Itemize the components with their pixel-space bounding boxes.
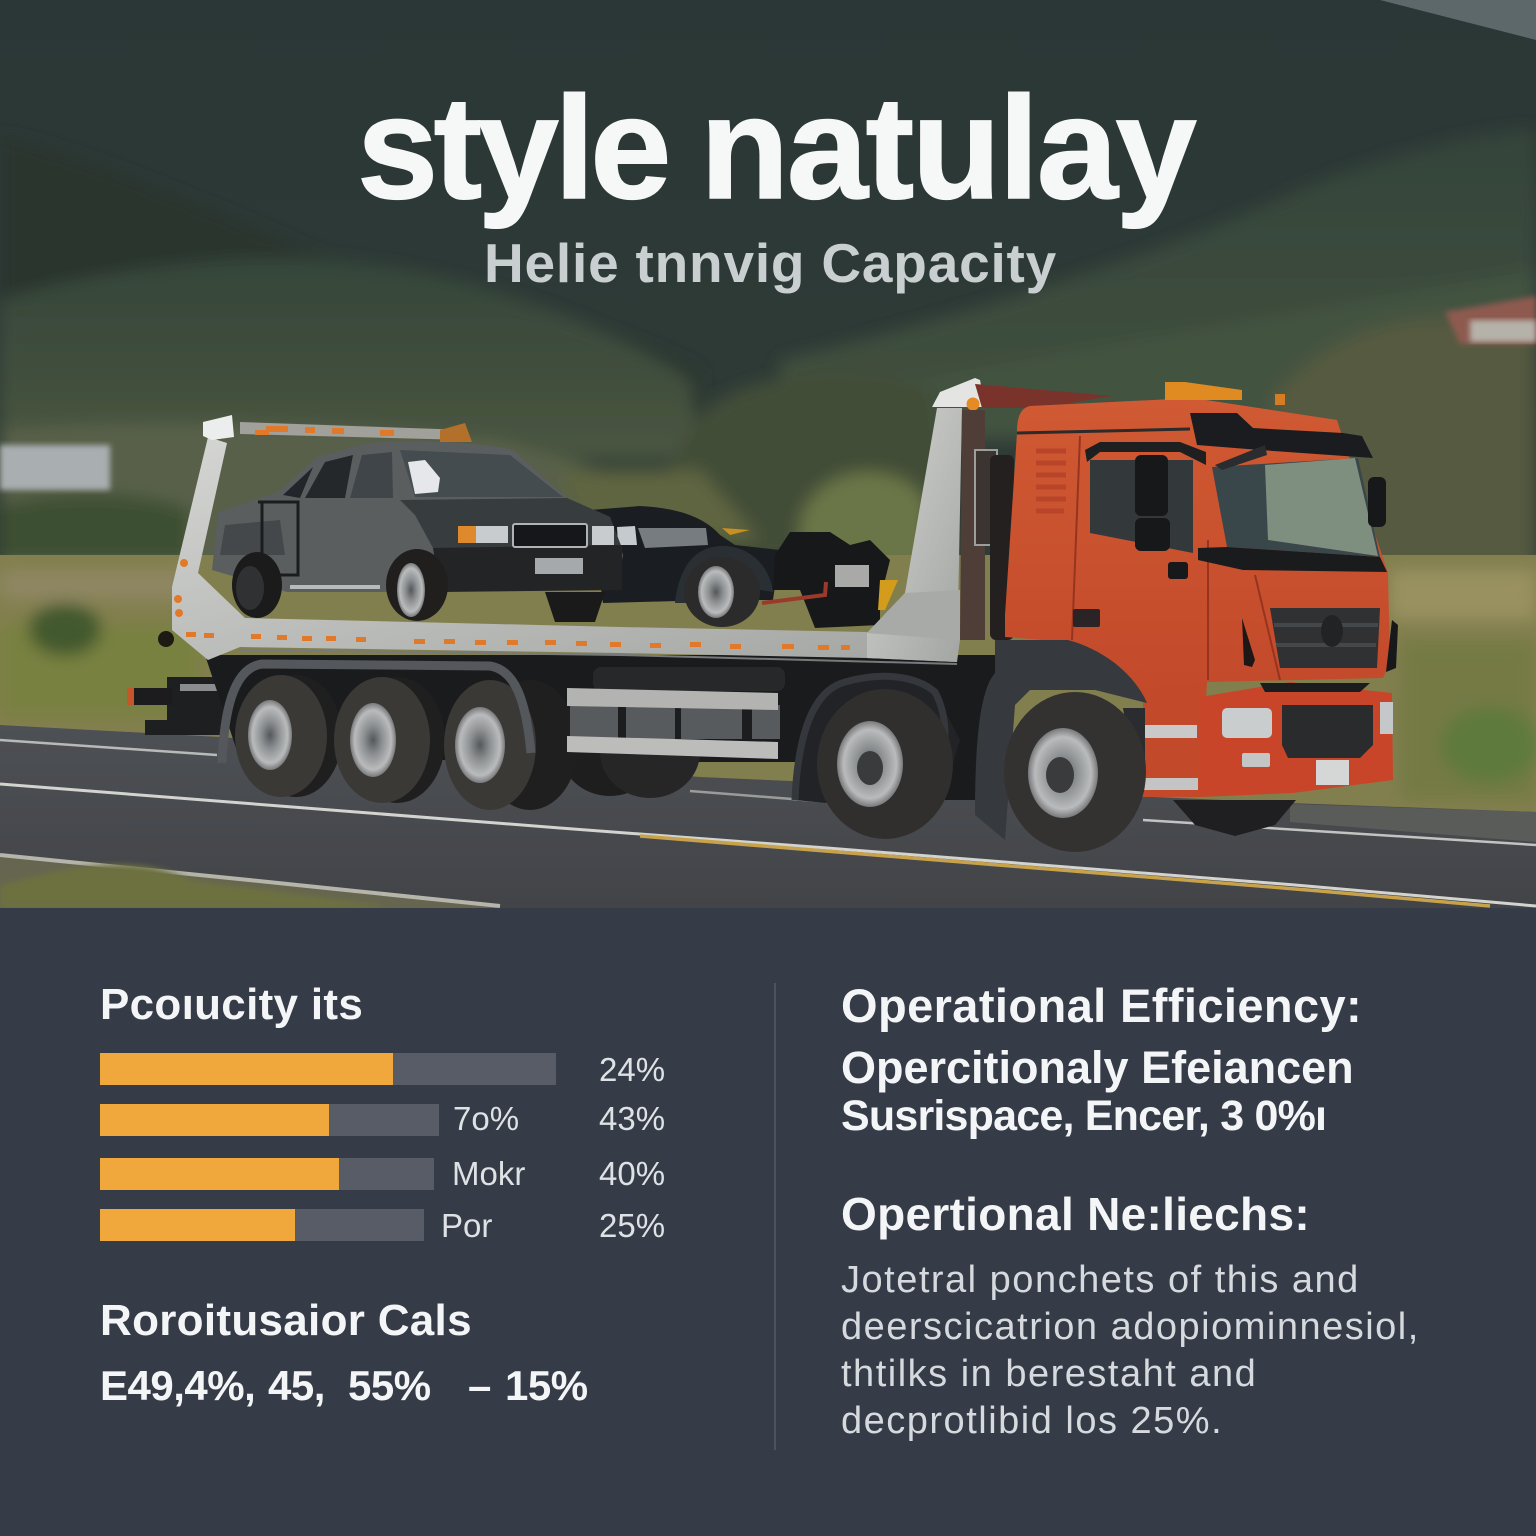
bar row 2: [100, 1100, 665, 1137]
bar row 2: 7o%: [453, 1100, 519, 1137]
stat values: 55%: [348, 1362, 431, 1409]
background hills: [0, 0, 1536, 600]
rear hitch frame: [127, 631, 227, 735]
heading: bars: Pcoıucity its: [100, 980, 363, 1029]
rear axles: [235, 675, 700, 810]
orange truck cab: [990, 382, 1398, 797]
heading: needs: Opertional Ne:liechs:: [841, 1188, 1310, 1240]
panel: operational efficiency: [841, 979, 1420, 1442]
bar row 3: Mokr: [452, 1155, 525, 1192]
grey sedan on deck: [212, 442, 623, 622]
body text: decprotlibid los 25%.: [841, 1400, 1223, 1442]
stat values: E49,4%,: [100, 1362, 255, 1409]
heading: efficiency: Operational Efficiency:: [841, 979, 1362, 1032]
stat values: 15%: [505, 1362, 588, 1409]
panel: productivity bars: [100, 980, 665, 1244]
panel: rotation stats: [100, 1296, 588, 1409]
lower dark panel: [0, 908, 1536, 1536]
subheading line 2: Susrispace, Encer, 3 0%ı: [841, 1092, 1326, 1140]
bar row 4: 25%: [599, 1207, 665, 1244]
road: [0, 725, 1536, 908]
title: natulay: [700, 66, 1194, 229]
subtitle: Helie tnnvig Capacity: [484, 232, 1057, 294]
front wheels and arches: [795, 640, 1296, 852]
body text: Jotetral ponchets of this and: [841, 1259, 1360, 1301]
rear fender: [222, 664, 531, 763]
column divider: [774, 983, 776, 1450]
stat values: –: [468, 1362, 491, 1409]
headboard: [867, 378, 1112, 662]
body text: [841, 1259, 1420, 1442]
photo: flatbed tow truck carrying cars on a rural road: [0, 0, 1536, 908]
fuel tanks and rails: [567, 667, 785, 759]
stat values: [100, 1362, 588, 1409]
bar row 3: 40%: [599, 1155, 665, 1192]
bar row 3: [100, 1155, 665, 1192]
body text: thtilks in berestaht and: [841, 1353, 1257, 1395]
flatbed tow truck: [127, 378, 1398, 852]
bar row 1: [100, 1051, 665, 1088]
subheading line 1: Opercitionaly Efeiancen: [841, 1042, 1354, 1093]
body text: deerscicatrion adopiominnesiol,: [841, 1306, 1420, 1348]
flatbed deck: [172, 415, 960, 664]
bar row 4: Por: [441, 1207, 492, 1244]
bar row 2: 43%: [599, 1100, 665, 1137]
dark rear car and exposed chassis load: [590, 506, 898, 628]
bar row 1: 24%: [599, 1051, 665, 1088]
title: style: [357, 66, 667, 229]
heading: rotation: Roroitusaior Cals: [100, 1296, 472, 1345]
bar row 4: [100, 1207, 665, 1244]
grass field: [0, 555, 1536, 845]
distant buildings: [0, 445, 110, 490]
chassis shadow under deck: [205, 655, 1000, 800]
title: [357, 66, 1197, 229]
stat values: 45,: [268, 1362, 325, 1409]
